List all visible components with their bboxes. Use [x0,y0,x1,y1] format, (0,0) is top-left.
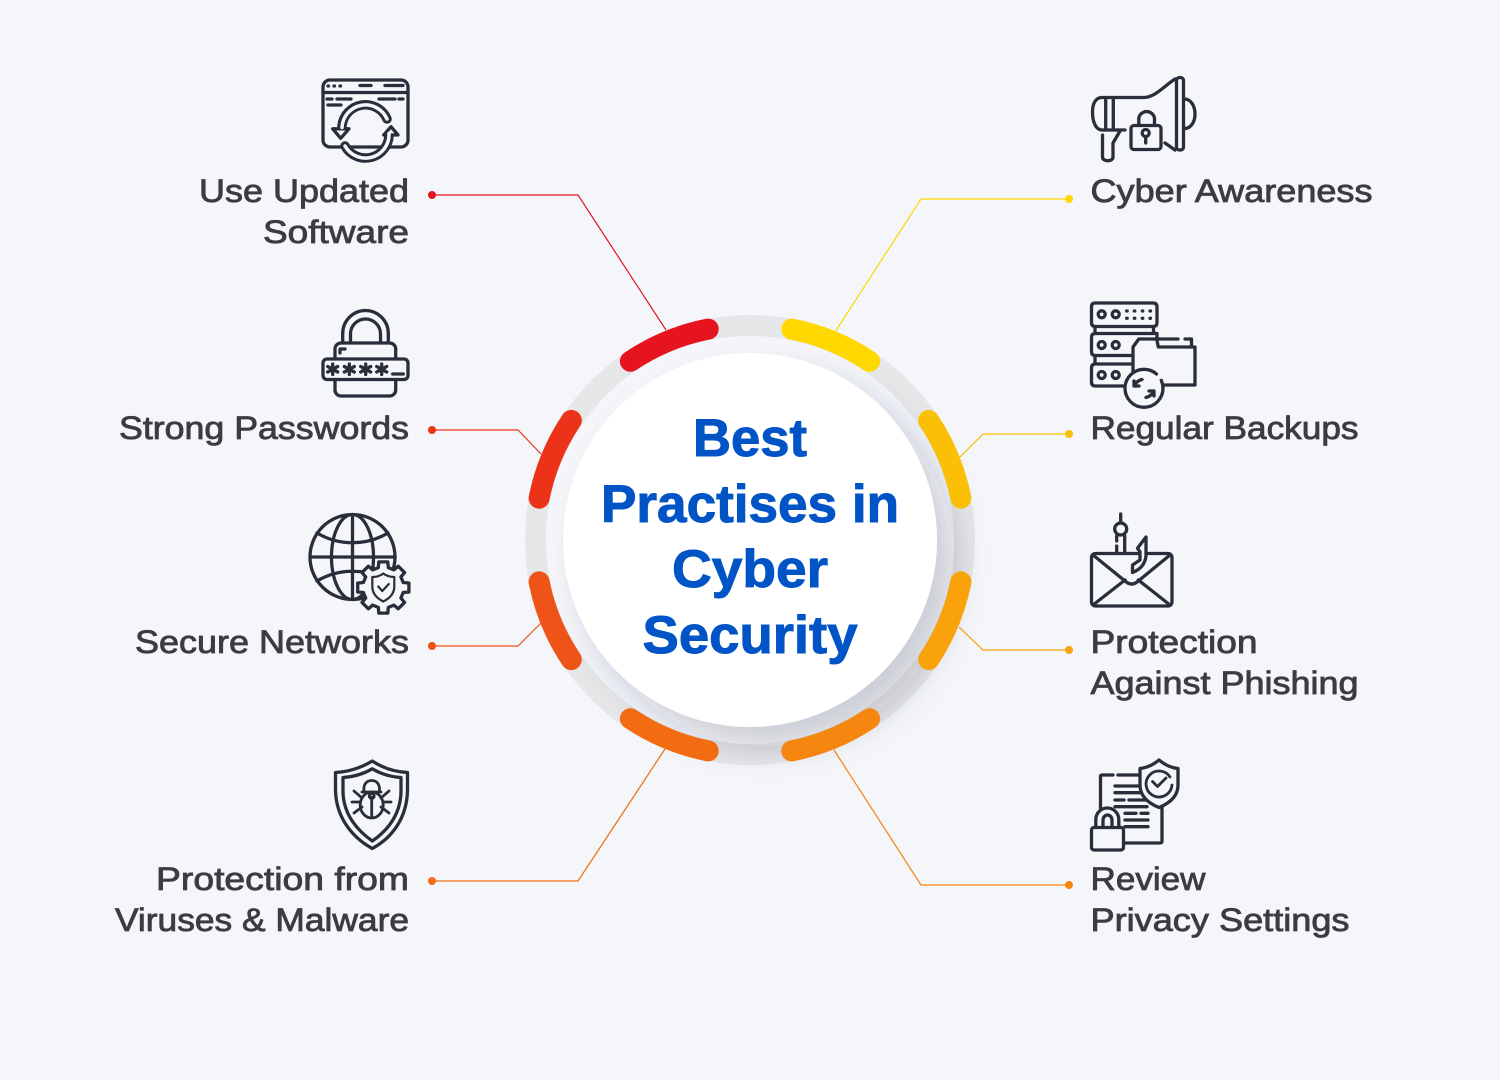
white centre disc [563,353,937,727]
icon: globe with security gear [310,514,409,613]
label: review privacy settings: Privacy Settings [1090,902,1350,938]
label: review privacy settings: Review [1090,861,1206,897]
label: protection against phishing: Against Phishing [1090,665,1358,701]
connector: cyber awareness [835,195,1073,332]
label: cyber awareness: Cyber Awareness [1090,173,1372,209]
connector: protection against phishing [959,627,1073,654]
connector: strong passwords [428,426,541,454]
title: Practises in [601,475,899,534]
label: protection against phishing [1090,624,1358,701]
ring segment: red orange [539,420,571,498]
label: protection from viruses and malware: Viruses & Malware [115,902,409,938]
label: use updated software: Use Updated [199,173,409,209]
ring segment: orange red [539,582,571,660]
icon: envelope with phishing hook [1092,514,1172,606]
connector: protection from viruses and malware [428,749,665,885]
ring segment: amber [929,582,961,660]
icon: servers with folder and sync [1092,303,1195,407]
icon: shield with bug [336,761,408,848]
ring segment: red [630,329,708,361]
icon: browser window with refresh arrows [323,80,408,158]
label: strong passwords: Strong Passwords [119,410,409,446]
central hub [536,326,964,754]
connector: regular backups [960,430,1073,457]
connector: use updated software [428,191,666,330]
ring segment: orange [630,719,708,751]
connector: review privacy settings [834,750,1073,889]
ring segment: dark amber [792,719,870,751]
label: regular backups: Regular Backups [1090,410,1358,446]
ring segment: yellow [792,329,870,361]
label: use updated software: Software [263,214,409,250]
grey outer ring [536,326,964,754]
title [601,409,899,665]
title: Cyber [672,540,828,599]
icon: padlock with password field [323,311,408,396]
title: Security [642,606,858,665]
label: protection against phishing: Protection [1090,624,1258,660]
label: protection from viruses and malware: Protection from [156,861,409,897]
label: use updated software [199,173,409,250]
label: protection from viruses and malware [115,861,409,938]
title: Best [693,409,807,468]
icon: privacy document with shield and lock [1092,760,1178,850]
ring segment: golden [929,420,961,498]
label: review privacy settings [1090,861,1350,938]
icon: megaphone with lock [1092,78,1195,161]
connector: secure networks [428,623,541,650]
label: secure networks: Secure Networks [135,624,409,660]
